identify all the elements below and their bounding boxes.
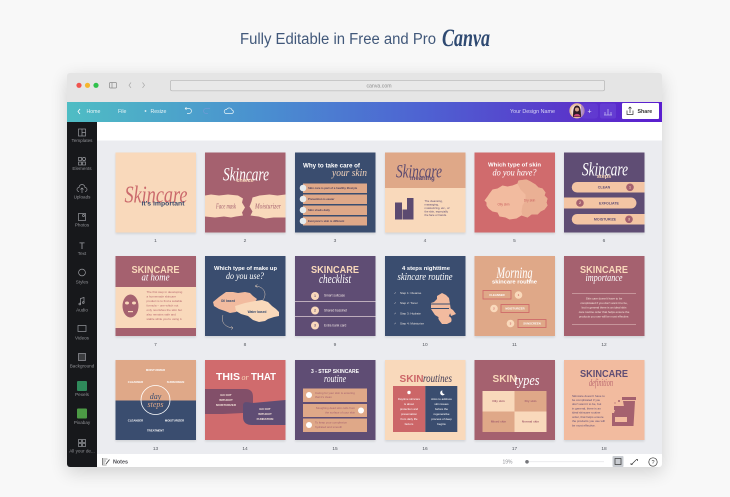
card 13: SUNSCREEN xyxy=(167,380,184,384)
card 10: ✓ xyxy=(394,312,397,316)
page numbers: 12 xyxy=(601,342,607,348)
icon: face mask xyxy=(122,294,138,318)
card 13: TREATMENT xyxy=(147,428,164,432)
card 12: SKINCARE xyxy=(580,264,628,276)
page numbers: 11 xyxy=(512,342,517,348)
sidebar icons xyxy=(77,129,87,446)
card 11: SUNSCREEN xyxy=(523,322,541,326)
page numbers: 4 xyxy=(424,238,427,244)
card 4: Skincare xyxy=(396,162,442,182)
card 18: be complicated if you xyxy=(572,398,601,402)
card 18: be most effective. xyxy=(572,424,596,428)
card 2: choice xyxy=(236,178,254,184)
page numbers: 10 xyxy=(422,342,428,348)
card 10: Step 2: Toner xyxy=(400,301,418,305)
card 18: in general, there is an xyxy=(572,406,601,410)
page numbers: 16 xyxy=(422,446,428,452)
notes bar: ? xyxy=(651,460,655,466)
card 16: skin issues xyxy=(434,402,449,406)
card 8: do you use? xyxy=(226,271,264,281)
card 6: Skincare xyxy=(582,160,628,180)
card 13: day xyxy=(150,392,162,401)
card 14: WITHOUT xyxy=(219,398,233,402)
card 13: CLEANSER xyxy=(128,380,143,384)
card 10: ✓ xyxy=(394,291,397,295)
avatar xyxy=(569,103,585,118)
card 4: massaging, xyxy=(424,202,439,206)
card 16: SKIN xyxy=(400,374,424,385)
card 17: Mixed skin xyxy=(491,420,506,424)
left sidebar: T xyxy=(79,241,85,251)
card 11 xyxy=(474,256,555,338)
card 18: order, that helps ensure xyxy=(572,415,604,419)
icon: cream jar xyxy=(429,293,456,324)
card 7: a homemade skincare xyxy=(146,294,176,298)
card 14: FUNDATION xyxy=(257,417,273,421)
card 10 xyxy=(385,256,466,338)
card 16: preservation xyxy=(401,412,417,416)
card 13: steps xyxy=(148,400,164,409)
icon: jar and tube xyxy=(612,397,636,426)
card 4: meaning xyxy=(410,176,435,182)
arrows xyxy=(255,284,265,301)
notes bar: Notes xyxy=(113,460,128,466)
card 12: but in general there is an ideal skin xyxy=(582,306,627,310)
card 12: importance xyxy=(586,273,623,284)
card 15: routine xyxy=(324,374,346,385)
card 16: routines xyxy=(423,371,452,385)
card 9: 3 xyxy=(314,324,316,328)
page numbers: 17 xyxy=(512,446,517,452)
share button xyxy=(622,103,659,119)
card 11: Morning xyxy=(496,265,532,282)
card 15: the surface of your skin xyxy=(325,410,355,414)
card 2: Skincare xyxy=(223,164,269,186)
card 1: it's important xyxy=(142,202,184,208)
editor toolbar: Home xyxy=(86,109,100,115)
card 5: Dry skin xyxy=(524,198,535,202)
card 15 xyxy=(295,360,376,442)
card 2 xyxy=(205,152,286,234)
card 7: also remains safe and xyxy=(146,312,176,316)
card 6: 1 xyxy=(629,186,631,190)
card 9: SKINCARE xyxy=(311,264,359,276)
card 11: MOISTURIZER xyxy=(505,306,525,310)
card 16: Aims to address xyxy=(431,397,452,401)
card 14: or xyxy=(241,373,249,382)
card 14: GO OUT xyxy=(220,393,232,397)
editor toolbar: File xyxy=(118,109,126,115)
card 16: begins xyxy=(437,422,446,426)
card 15: hydrated and smooth xyxy=(315,425,343,429)
left sidebar: Templates xyxy=(72,138,93,143)
left sidebar: Text xyxy=(78,251,87,256)
card 3: your skin xyxy=(331,168,367,179)
title: Canva xyxy=(442,25,490,52)
card 7: The first step in developing xyxy=(146,290,183,294)
card 6: 2 xyxy=(579,201,581,205)
card 7: stable while you're using it. xyxy=(146,317,182,321)
card 16: factors xyxy=(405,422,414,426)
card 14: THIS xyxy=(216,372,240,383)
card 14: MOISTURIZER xyxy=(216,403,237,407)
icon: skincare products xyxy=(395,198,414,220)
card 11: 2 xyxy=(493,306,495,310)
card 11: skincare routine xyxy=(492,280,537,286)
card 17 xyxy=(474,360,555,442)
card 4: the face or hands. xyxy=(424,213,447,217)
card 13: MOISTURIZER xyxy=(146,368,165,372)
card 5 xyxy=(474,152,555,234)
blob: oil based xyxy=(213,292,257,313)
editor toolbar: + xyxy=(587,108,592,116)
card 3: Why to take care of xyxy=(303,164,361,170)
card 5: Which type of skin xyxy=(488,162,541,168)
left sidebar: Pixabay xyxy=(74,420,91,425)
card 16: Daytime skincare xyxy=(398,397,420,401)
card 17: SKIN xyxy=(492,374,516,385)
browser window xyxy=(67,73,662,467)
card 10: ✓ xyxy=(394,322,397,326)
left sidebar: Pexels xyxy=(75,392,90,397)
card 17: Oily skin xyxy=(492,399,505,403)
page numbers: 9 xyxy=(334,342,337,348)
card 1: Skincare xyxy=(124,182,188,208)
page numbers: 5 xyxy=(513,238,516,244)
card 18: don't want it to be, but xyxy=(572,402,601,406)
card 18: definition xyxy=(589,377,613,389)
left sidebar: Uploads xyxy=(74,194,91,200)
page numbers: 6 xyxy=(603,238,606,244)
card 12 xyxy=(564,256,644,338)
card 8 xyxy=(205,256,286,338)
card 7: product is to find a suitable xyxy=(146,299,183,303)
card 3: Prevention is easier xyxy=(308,197,335,201)
card 2: Moisturizer xyxy=(254,202,281,210)
card 16: protection and xyxy=(400,407,419,411)
card 1 xyxy=(116,152,196,234)
card 18: Skincare doesn't have to xyxy=(572,394,605,398)
card 3: Skin sheds daily xyxy=(308,208,330,212)
left sidebar: Photos xyxy=(75,222,90,228)
card 10: skincare routine xyxy=(398,272,453,283)
notes bar xyxy=(97,454,662,467)
card 9: Shared bassinet xyxy=(324,308,347,312)
card 16: regenerative xyxy=(433,412,450,416)
left sidebar: Elements xyxy=(72,166,92,171)
title xyxy=(240,25,490,52)
card 8: Water based xyxy=(248,310,266,314)
left sidebar: Styles xyxy=(76,280,89,284)
page numbers: 18 xyxy=(601,446,607,452)
card 7: formula – one which not xyxy=(146,304,179,308)
page numbers: 14 xyxy=(242,446,248,452)
left sidebar: Videos xyxy=(75,336,90,340)
editor toolbar: Your Design Name xyxy=(510,109,555,115)
card 14: THAT xyxy=(251,372,276,383)
card 17: types xyxy=(514,373,540,389)
card 15: 3 - STEP SKINCARE xyxy=(311,369,360,375)
card 7: only nourishes the skin but xyxy=(146,308,182,312)
card 16: from daily life xyxy=(400,417,418,421)
card 12: care routine order that helps ensure the xyxy=(579,310,630,314)
card 13 xyxy=(116,360,196,442)
card 9: 1 xyxy=(314,294,316,298)
window shadow xyxy=(67,78,662,472)
card 7: SKINCARE xyxy=(132,264,180,276)
left sidebar: Audio xyxy=(76,308,88,312)
card 7 xyxy=(116,256,196,338)
card 16: is about xyxy=(404,402,414,406)
card 5: do you have? xyxy=(492,168,537,178)
card 8: Oil based xyxy=(221,299,235,303)
card 18 xyxy=(564,360,644,442)
card 15: Sloughing dead skin cells from xyxy=(316,406,356,410)
card 10: Step 4: Moisturize xyxy=(400,322,424,326)
card 18: SKINCARE xyxy=(580,368,628,380)
card 3: Everyone's skin is different xyxy=(308,219,344,223)
card 9: checklist xyxy=(319,271,351,286)
page numbers: 1 xyxy=(154,238,157,244)
card 12: Skin care doesn't have to be xyxy=(586,296,623,300)
card 4: moisturizing, etc., of xyxy=(424,206,450,210)
left sidebar: Background xyxy=(70,364,95,368)
card 15: Caring for your skin is ensuring xyxy=(315,391,355,395)
card 12: products you use will be most effective. xyxy=(579,314,629,318)
card 6: CLEAN xyxy=(598,186,611,190)
card 6: 3 xyxy=(628,218,630,222)
card 10: 4 steps nighttime xyxy=(402,266,450,272)
page numbers: 13 xyxy=(153,446,158,452)
card 6: MOISTURIZE xyxy=(594,218,617,222)
card 17: Normal skin xyxy=(522,420,539,424)
page numbers: 3 xyxy=(334,238,337,244)
card 11: 1 xyxy=(518,293,520,297)
card 14: WITHOUT xyxy=(258,412,272,416)
card 10: Step 3: Hydrate xyxy=(400,312,421,316)
card 15: To keep your complexion xyxy=(315,420,347,424)
card 8: Which type of make up xyxy=(214,266,278,272)
card 5: Oily skin xyxy=(497,202,510,206)
page numbers: 8 xyxy=(244,342,247,348)
browser title bar xyxy=(67,73,662,102)
card 16: before the xyxy=(435,407,448,411)
card 3: Skin care is part of a healthy lifestyle xyxy=(308,186,358,190)
card 12: complicated if you don't want it to be, xyxy=(580,301,628,305)
card 6: EXFOLIATE xyxy=(599,201,620,205)
card 16 xyxy=(385,360,466,442)
card 14: GO OUT xyxy=(259,407,271,411)
card 9: Extra bank card xyxy=(324,324,347,328)
card 15: that it's clean xyxy=(315,395,332,399)
card 11: CLEANSER xyxy=(489,293,505,297)
card 6 xyxy=(564,152,644,234)
card 3 xyxy=(295,152,376,234)
page numbers xyxy=(153,238,607,452)
card 4: the skin, especially xyxy=(424,210,449,214)
card 13: MOISTURIZER xyxy=(165,418,184,422)
browser title bar: canva.com xyxy=(366,84,392,90)
page numbers: 15 xyxy=(332,446,338,452)
notes bar: 19% xyxy=(502,460,513,466)
card 7: at home xyxy=(142,272,170,284)
editor toolbar: Resize xyxy=(150,109,166,115)
card 11: 3 xyxy=(510,322,512,326)
card 10: Step 1: Cleanse xyxy=(400,291,422,295)
card 9: Smart suitcase xyxy=(324,294,345,298)
card 17: Dry skin xyxy=(525,399,537,403)
title: Fully Editable in Free and Pro xyxy=(240,31,436,48)
card 4 xyxy=(385,152,466,234)
blob: skin map xyxy=(484,180,548,220)
share button: Share xyxy=(638,109,652,115)
card 10: ✓ xyxy=(394,301,397,305)
blob: water based xyxy=(235,300,279,322)
card grid xyxy=(116,152,644,452)
card 4: The cleansing, xyxy=(424,199,443,203)
card 16: process of deep xyxy=(431,417,452,421)
card 2: Face mask xyxy=(215,202,236,210)
card 18: the products you use will xyxy=(572,419,605,423)
brush strokes xyxy=(205,194,245,218)
page numbers: 7 xyxy=(154,342,157,348)
card 6: steps xyxy=(597,174,611,180)
card 9 xyxy=(295,256,376,338)
card 14 xyxy=(205,360,286,442)
card 9: 2 xyxy=(314,309,316,313)
white band above canvas xyxy=(97,122,662,140)
card 13: CLEANSER xyxy=(128,418,143,422)
page numbers: 2 xyxy=(244,238,247,244)
editor toolbar xyxy=(67,102,662,122)
card 18: ideal skincare routine xyxy=(572,410,601,414)
left sidebar: All your de... xyxy=(69,448,95,454)
left sidebar xyxy=(67,122,97,467)
